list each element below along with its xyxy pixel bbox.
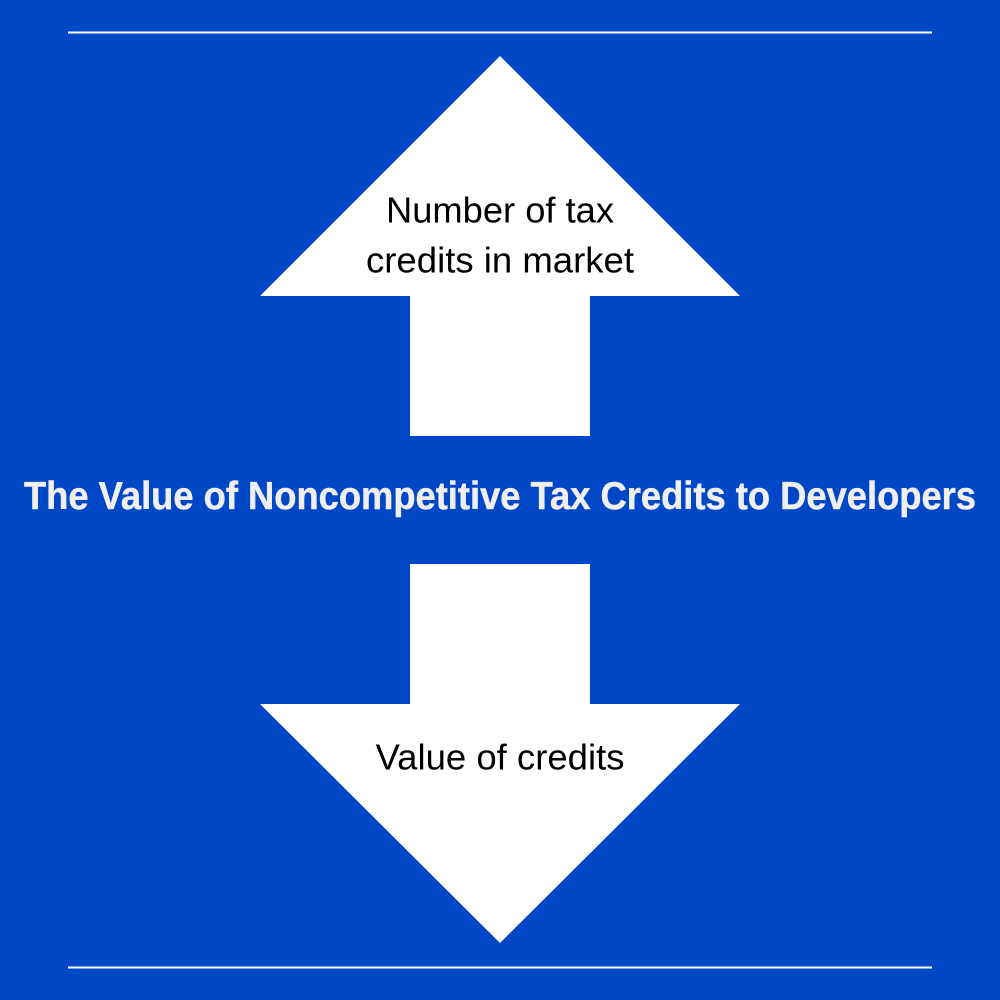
down arrow: value of credits xyxy=(260,564,740,943)
up arrow label: credits in market xyxy=(366,240,634,280)
up arrow: number of tax credits in market xyxy=(260,56,740,436)
up arrow label: Number of tax xyxy=(386,190,614,230)
down arrow label: Value of credits xyxy=(376,736,624,778)
